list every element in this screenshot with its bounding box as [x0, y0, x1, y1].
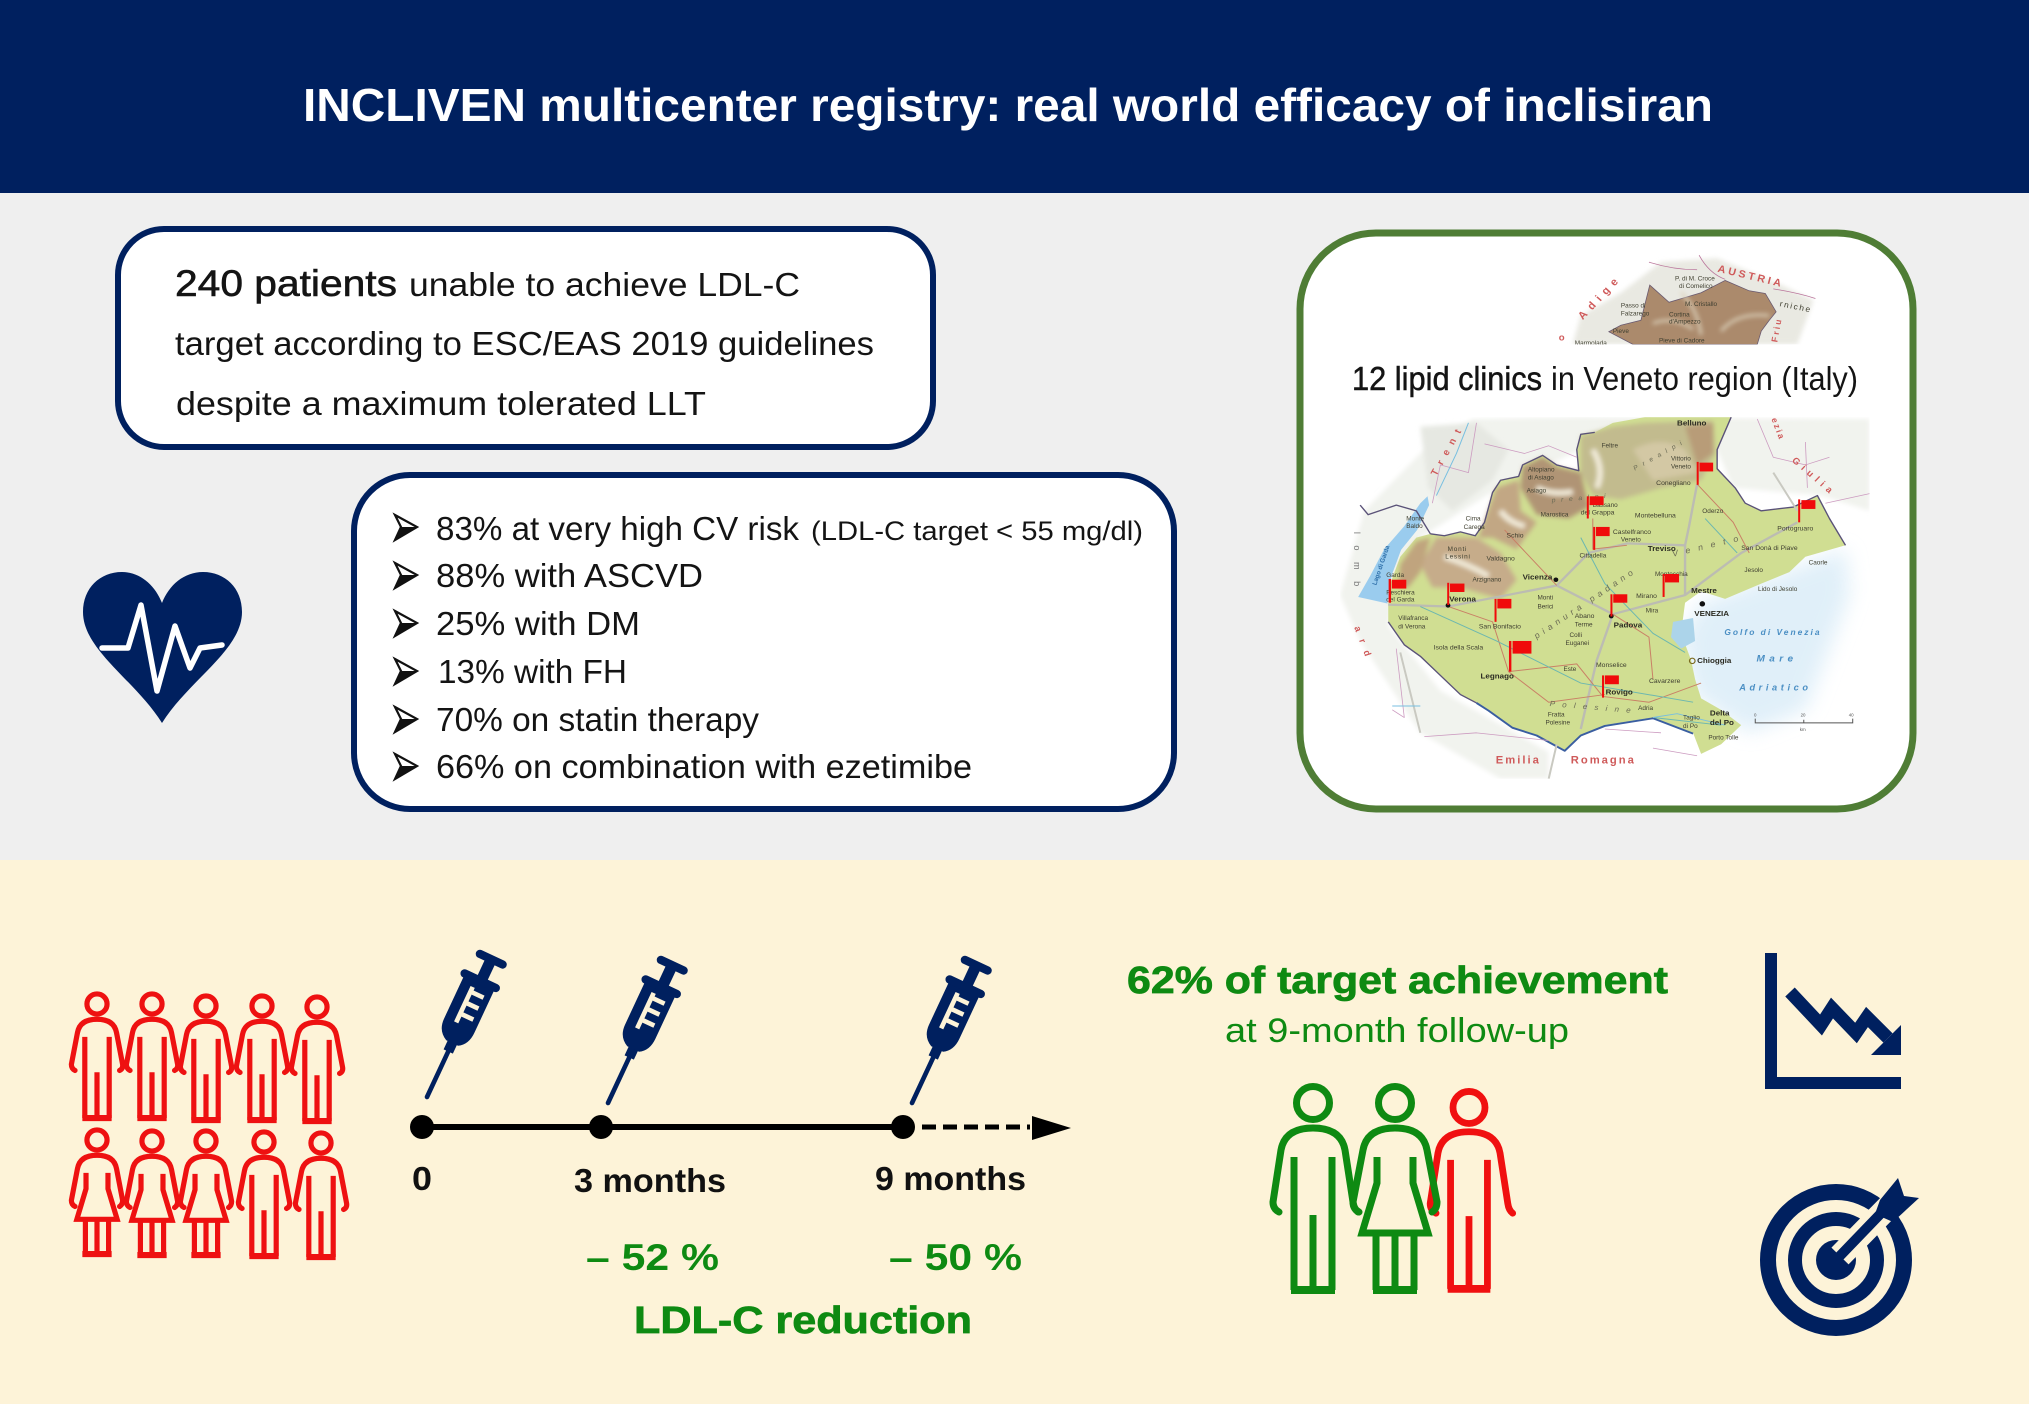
panel: patient characteristics [354, 475, 1174, 809]
place labels: Veneto [1671, 532, 1747, 559]
place labels: Verona [1449, 595, 1477, 604]
timeline labels: 9 months [875, 1160, 1026, 1197]
map: northern fragment: Passo di [1621, 302, 1645, 309]
scale bar: km [1800, 727, 1806, 732]
place labels: del Grappa [1581, 510, 1615, 517]
icon: group of patients [71, 994, 347, 1257]
scale bar: 40 [1849, 713, 1854, 718]
place labels: Cavarzere [1649, 678, 1681, 685]
panel: patients summary [118, 229, 933, 447]
place labels: Lessini [1445, 554, 1471, 561]
place labels: Caorle [1809, 560, 1828, 566]
borders [1360, 417, 1870, 779]
place labels: Altopiano [1528, 467, 1555, 473]
LDL-C reduction values: – 52 % [586, 1237, 719, 1278]
place labels: Rovigo [1606, 688, 1633, 697]
icon: syringe at 3 months [588, 952, 693, 1112]
place labels: Golfo di Venezia [1724, 628, 1822, 637]
place labels: Taglio [1683, 715, 1700, 721]
text: patient description: 240 patients [175, 263, 397, 304]
map: northern fragment: Friu [1769, 316, 1784, 343]
place labels: Monselice [1596, 662, 1627, 669]
place labels: Vittorio [1671, 455, 1691, 462]
bullet list: 25% with DM [436, 605, 640, 642]
place labels: Baldo [1406, 523, 1423, 530]
bullet list: 13% with FH [438, 653, 627, 690]
bullet list: 88% with ASCVD [436, 557, 703, 594]
map: northern fragment: Pieve [1613, 328, 1629, 335]
place labels: Bassano [1593, 502, 1618, 509]
place labels: Belluno [1677, 419, 1707, 427]
map: northern fragment [1559, 255, 1815, 347]
map: northern fragment: o [1559, 332, 1565, 343]
place labels: Veneto [1671, 464, 1692, 471]
LDL-C reduction values [586, 1237, 1022, 1278]
map: northern fragment: di Comelico [1679, 283, 1713, 290]
map: Veneto region with clinics [1340, 416, 1870, 779]
text: patient description: unable to achieve LDL-C [409, 266, 800, 303]
lake [1358, 496, 1429, 603]
text: patient description: despite a maximum tolerated LLT [176, 385, 706, 422]
place labels: lomb [1352, 532, 1363, 598]
map heading [1352, 360, 1858, 397]
icon: syringe at baseline [407, 946, 512, 1106]
place labels: Polesine [1549, 699, 1638, 715]
timeline [410, 1115, 1071, 1140]
timeline labels: 0 [412, 1160, 432, 1197]
place labels: Abano [1575, 613, 1595, 620]
place labels: Porto Tolle [1708, 735, 1739, 742]
follow-up subheading: at 9-month follow-up [1225, 1012, 1569, 1050]
bullet list: 70% on statin therapy [436, 701, 759, 738]
place labels: Villafranca [1398, 615, 1429, 622]
surrounding terrain [1340, 417, 1870, 779]
place labels: Valdagno [1487, 556, 1515, 563]
place labels: Este [1564, 666, 1577, 673]
place labels: Berici [1537, 604, 1553, 610]
timeline labels: 3 months [574, 1162, 726, 1199]
map: northern fragment: rniche [1779, 299, 1813, 314]
place labels: Jesolo [1744, 567, 1763, 574]
place labels: Cittadella [1580, 553, 1607, 559]
clinic flags [1389, 462, 1815, 698]
icon: three people, target achievement [1273, 1086, 1513, 1290]
place labels: Marostica [1541, 512, 1569, 519]
place labels: ezia [1769, 416, 1787, 442]
place labels: Legnago [1480, 672, 1514, 680]
place labels: Fratta [1548, 712, 1565, 719]
scale bar [1754, 713, 1854, 732]
map: northern fragment: P. di M. Croce [1675, 276, 1715, 282]
place labels: Mira [1646, 607, 1659, 614]
panel: map of Veneto [1300, 233, 1913, 809]
place labels: Treviso [1648, 544, 1676, 553]
map: northern fragment: Cortina [1669, 312, 1690, 318]
icon: syringe at 9 months [892, 952, 997, 1112]
place labels: Monte [1406, 516, 1425, 522]
place labels: Carega [1464, 524, 1485, 531]
map heading: in Veneto region (Italy) [1551, 360, 1858, 397]
place labels: Portogruaro [1777, 526, 1814, 533]
place labels: ard [1352, 625, 1377, 665]
map: northern fragment: d'Ampezzo [1669, 318, 1701, 325]
map: northern fragment: Falzarego [1621, 311, 1650, 318]
place labels: Asiago [1527, 488, 1547, 494]
place labels: Cima [1466, 516, 1481, 522]
place labels [1352, 416, 1839, 766]
bullet list: 83% at very high CV risk [436, 510, 799, 547]
map: northern fragment: AUSTRIA [1716, 263, 1785, 290]
map: northern fragment: Adige [1576, 272, 1625, 322]
place labels: Euganei [1566, 640, 1589, 647]
header band [0, 0, 2029, 193]
place labels: Peschiera [1386, 589, 1415, 596]
place labels: Oderzo [1702, 508, 1724, 515]
place labels: Emilia [1496, 755, 1541, 766]
target achievement heading: 62% of target achievement [1127, 960, 1668, 1002]
text: patient description [175, 263, 874, 422]
place labels: Castelfranco [1613, 529, 1651, 536]
place labels: Giulia [1790, 455, 1839, 498]
icon: heart with pulse [83, 572, 242, 723]
place labels: Trent [1429, 422, 1468, 478]
place labels: Feltre [1602, 443, 1619, 450]
place labels: Terme [1575, 622, 1593, 628]
map: northern fragment: Marmolada [1575, 340, 1607, 347]
place labels: di Po [1683, 723, 1698, 730]
place labels: Conegliano [1656, 480, 1691, 487]
place labels: prealpi [1550, 493, 1612, 504]
place labels: Delta [1710, 709, 1730, 718]
place labels: Colli [1570, 632, 1582, 639]
place labels: Vicenza [1523, 573, 1553, 582]
place labels: Lago di Garda [1371, 544, 1392, 586]
timeline labels [412, 1160, 1026, 1199]
cream lower background [0, 860, 2029, 1404]
place labels: Isola della Scala [1434, 645, 1483, 651]
place labels: Prealpi [1632, 438, 1688, 472]
place labels: Lido di Jesolo [1758, 586, 1798, 593]
text: patient description: target according to ESC/EAS 2019 guidelines [175, 325, 874, 362]
place labels: Monti [1537, 595, 1553, 602]
map: northern fragment: M. Cristallo [1685, 301, 1718, 308]
place labels: San Bonifacio [1479, 623, 1521, 630]
region [1388, 417, 1845, 754]
place labels: Polesine [1545, 720, 1571, 726]
LDL-C reduction values: – 50 % [889, 1237, 1022, 1278]
lagoon [1671, 618, 1695, 649]
place labels: di Asiago [1528, 475, 1554, 481]
place labels: pianura padano [1531, 565, 1639, 641]
bullet list [395, 510, 1143, 785]
place labels: VENEZIA [1694, 609, 1729, 618]
map: northern fragment: Pieve di Cadore [1659, 338, 1705, 344]
place labels: Monti [1448, 546, 1467, 553]
place labels: San Donà di Piave [1741, 545, 1798, 552]
place labels: Mirano [1636, 593, 1657, 600]
icon: target with arrow [1768, 1178, 1919, 1328]
place labels: Schio [1507, 533, 1524, 540]
icon: declining chart [1765, 953, 1901, 1089]
title: INCLIVEN multicenter registry: real world efficacy of inclisiran [303, 79, 1713, 131]
roads and rivers [1388, 484, 1797, 729]
place labels: Mare [1756, 653, 1798, 664]
scale bar: 0 [1754, 713, 1757, 718]
bullet list: (LDL-C target < 55 mg/dl) [811, 516, 1143, 546]
place labels: Romagna [1571, 755, 1636, 766]
place labels: Mestre [1691, 586, 1718, 595]
LDL-C reduction label: LDL-C reduction [634, 1300, 972, 1342]
mountains [1398, 421, 1715, 599]
map heading: 12 lipid clinics [1352, 360, 1542, 397]
place labels: del Po [1710, 718, 1734, 727]
place labels: Veneto [1621, 537, 1641, 543]
place labels: Adria [1638, 705, 1654, 712]
scale bar: 20 [1801, 713, 1806, 718]
place labels: Chioggia [1697, 656, 1732, 665]
place labels: Garda [1386, 572, 1405, 579]
place labels: Arzignano [1472, 577, 1502, 584]
place labels: di Verona [1398, 623, 1426, 630]
place labels: Montebelluna [1635, 513, 1676, 520]
place labels: Montecchia [1655, 571, 1688, 578]
place labels: Padova [1614, 621, 1643, 630]
place labels: del Garda [1386, 597, 1415, 604]
bullet list: 66% on combination with ezetimibe [436, 748, 972, 785]
grey upper background [0, 193, 2029, 860]
place labels: Adriatico [1738, 683, 1812, 693]
